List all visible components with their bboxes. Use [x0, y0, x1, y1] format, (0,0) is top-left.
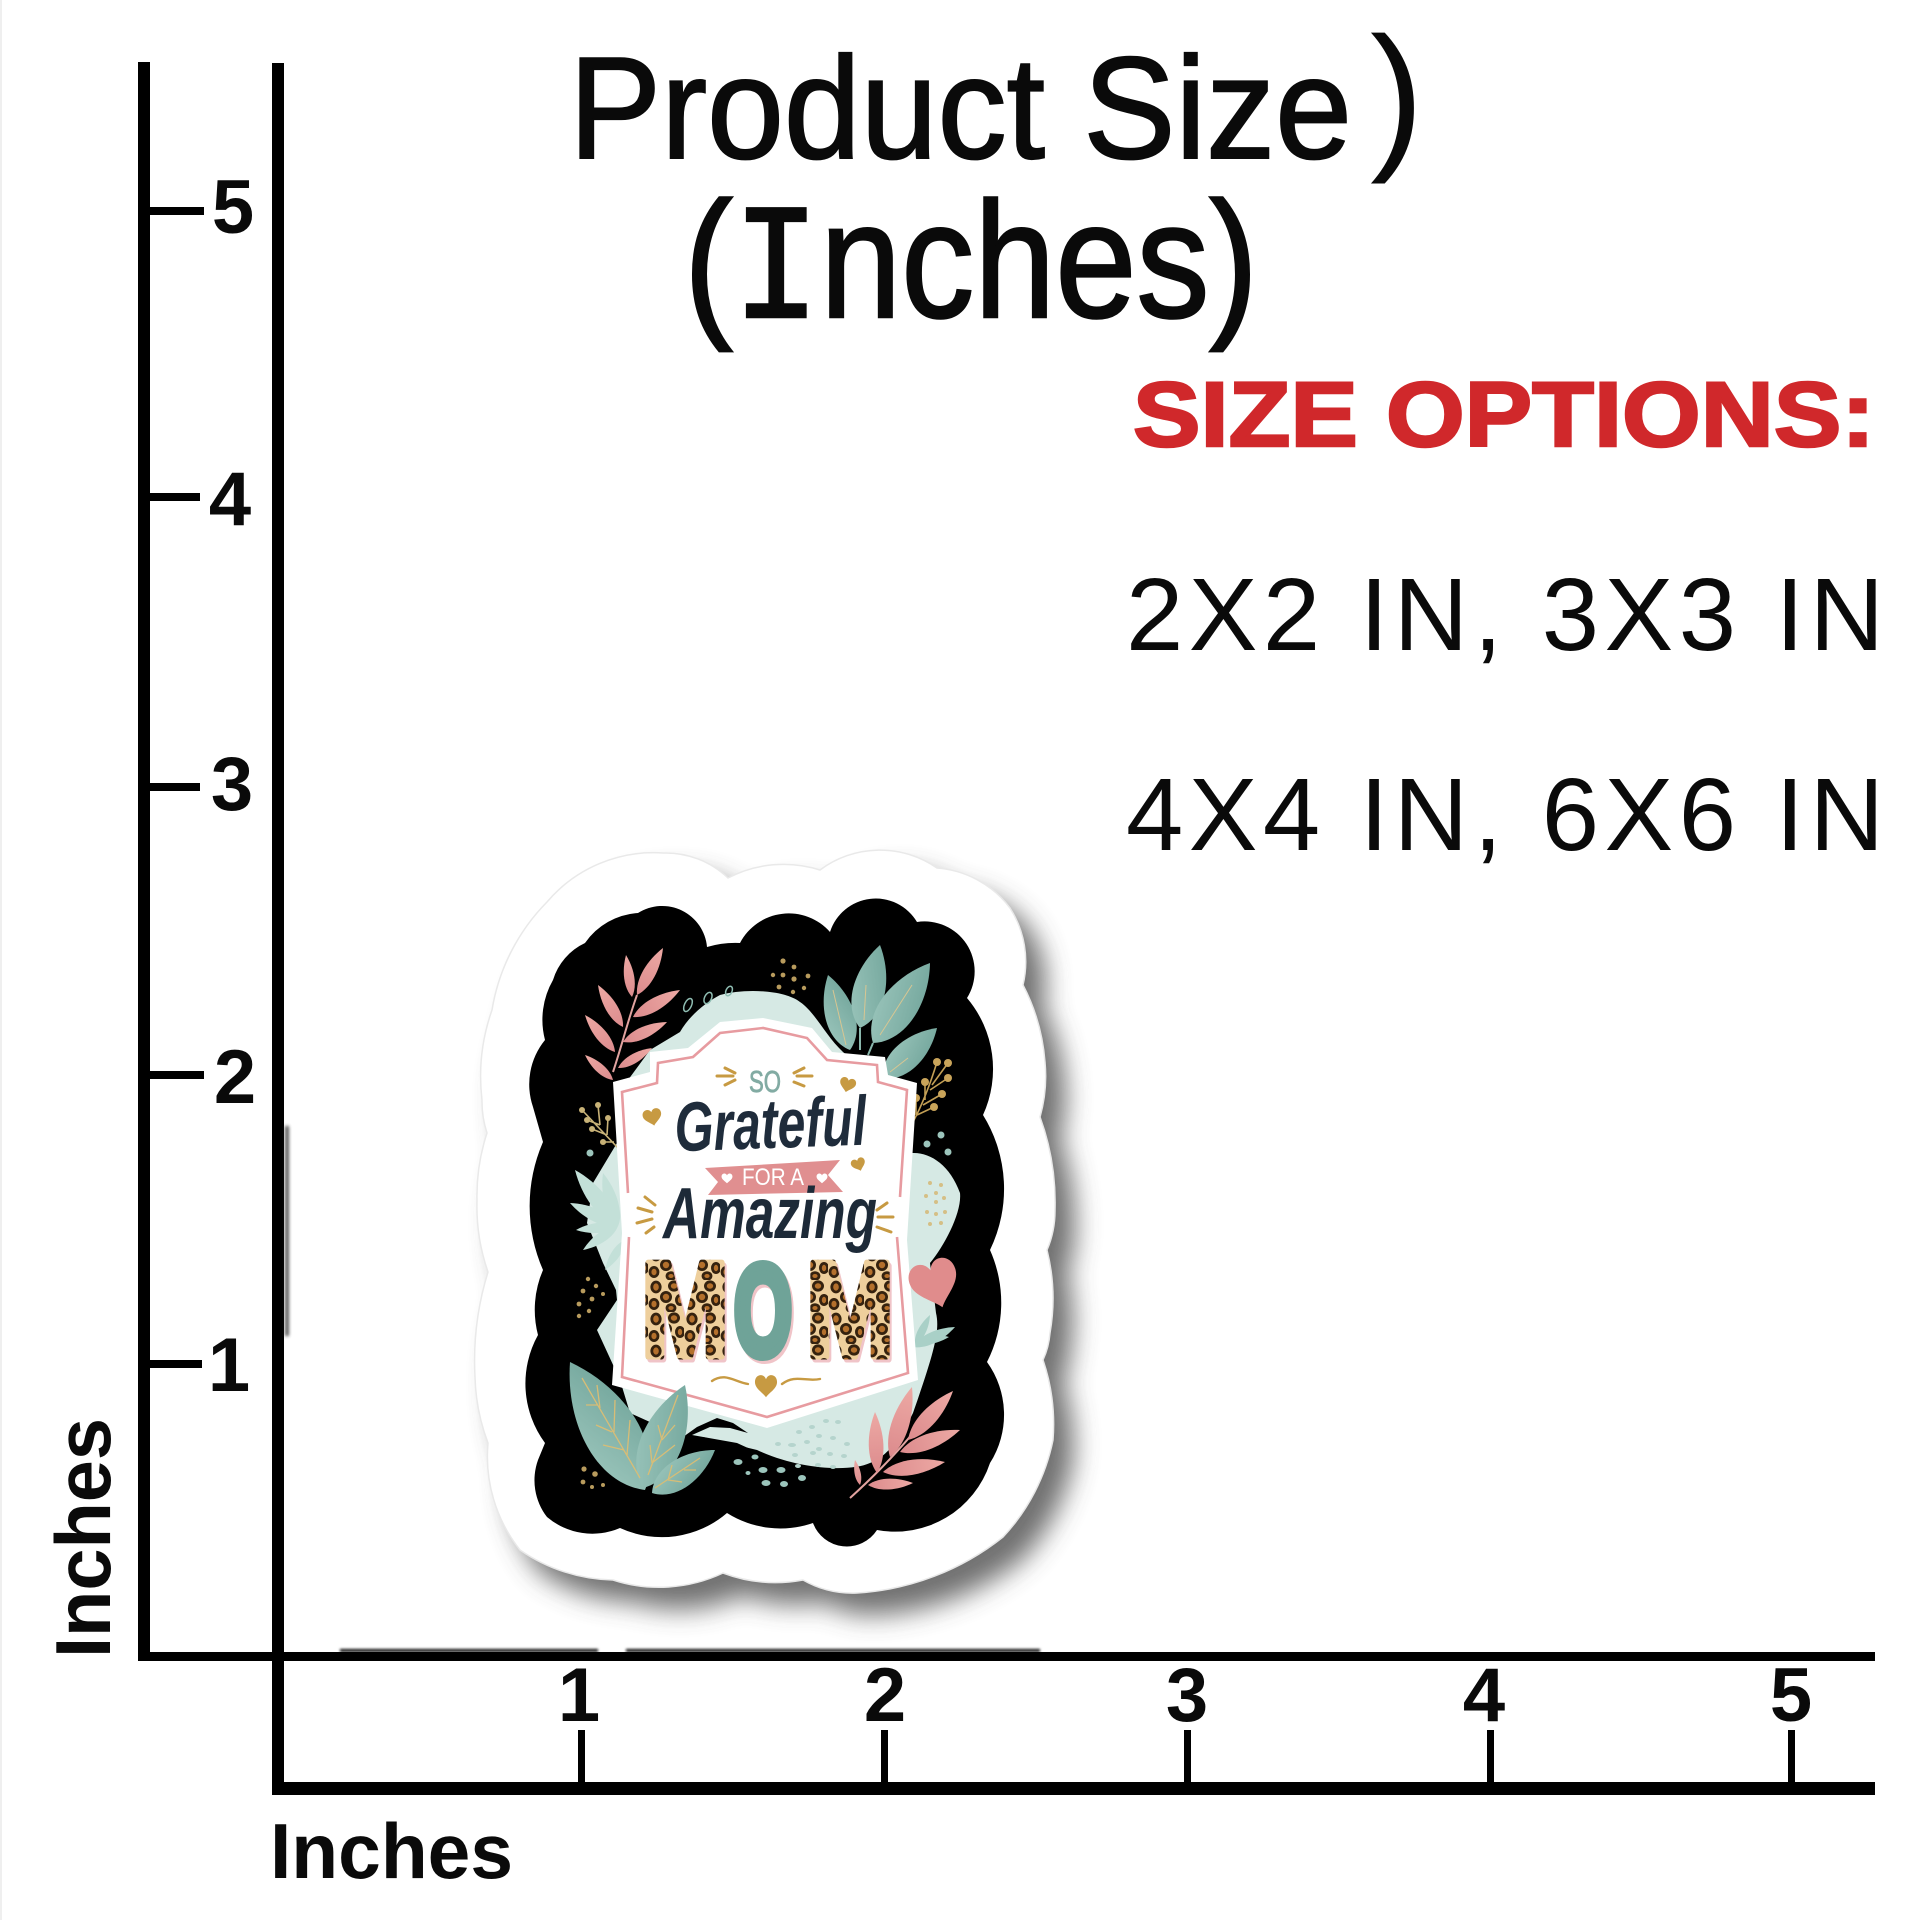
icon: pink heart	[905, 1254, 965, 1315]
speckles on mint	[775, 1419, 850, 1469]
word: Amazing: Amazing	[662, 1174, 877, 1254]
ruler tick labels: height: 4	[209, 457, 251, 542]
gold hearts and sparkles	[637, 1068, 893, 1397]
sticker: So Grateful for a Amazing Mom	[475, 850, 1075, 1615]
ruler tick labels: width: 3	[1166, 1653, 1208, 1738]
ruler tick labels: height: 5	[212, 165, 254, 250]
word: SO: SO	[749, 1064, 781, 1099]
fern: pale left	[567, 1165, 629, 1272]
horizontal ruler: width scale	[272, 1653, 1875, 1795]
ruler tick labels: width: 5	[1770, 1653, 1812, 1738]
vertical ruler: height scale	[138, 62, 256, 1661]
title: Product Size (Inches): (Inches)	[684, 168, 1258, 367]
leaves: teal lower left	[546, 1348, 723, 1505]
ruler tick labels: height: 2	[214, 1035, 256, 1120]
word: MOM	[641, 1234, 896, 1388]
title: Product Size (Inches): )	[1370, 4, 1424, 185]
ruler tick labels: height: 1	[208, 1323, 250, 1408]
card: white banner with pink frame	[612, 1018, 918, 1428]
ruler tick labels: width: 2	[864, 1653, 906, 1738]
word: MOM: M	[641, 1234, 729, 1385]
dots: teal accents	[586, 985, 952, 1487]
title: Product Size (Inches)	[569, 4, 1424, 367]
text: size list line 2: 4X4 IN, 6X6 IN	[1126, 757, 1884, 872]
word: MOM: O	[734, 1240, 792, 1383]
sprig: mint right	[911, 1313, 957, 1352]
sprig: pink lower right	[850, 1384, 963, 1498]
word: Grateful: Grateful	[673, 1082, 869, 1166]
ruler tick labels: height	[150, 165, 256, 1408]
word: MOM: M	[643, 1237, 731, 1388]
ruler tick labels: height: 3	[211, 742, 253, 827]
heading: size options: SIZE OPTIONS:	[1133, 364, 1875, 466]
sprig: pink upper left	[581, 945, 683, 1083]
horizontal axis line	[138, 1652, 1875, 1661]
axis label: horizontal inches: Inches	[270, 1807, 513, 1895]
sticker black scalloped background	[525, 899, 1004, 1546]
word: MOM: M	[806, 1234, 894, 1385]
title: Product Size (Inches): Product Size	[569, 27, 1352, 189]
vertical axis line	[272, 63, 284, 1795]
ruler tick labels: width	[558, 1653, 1812, 1782]
sprig: gold left	[579, 1102, 618, 1148]
black brush stroke	[683, 1418, 770, 1470]
text: size list line 1: 2X2 IN, 3X3 IN	[1126, 557, 1884, 672]
leaves: teal upper right	[814, 941, 946, 1088]
ruler tick labels: width: 1	[558, 1653, 600, 1738]
ribbon: FOR A: FOR A	[742, 1164, 804, 1191]
dots: gold on mint	[924, 1181, 947, 1226]
mint paint blob	[587, 991, 960, 1468]
sprig: gold right	[912, 1058, 952, 1122]
word: MOM: M	[808, 1237, 896, 1388]
dots: gold scatter	[577, 958, 810, 1489]
word: MOM: O	[736, 1243, 794, 1386]
ribbon: FOR A	[705, 1160, 843, 1195]
ruler tick labels: width: 4	[1463, 1653, 1505, 1738]
sticker white die-cut border	[475, 850, 1055, 1593]
axis label: vertical inches: Inches	[39, 1418, 127, 1658]
